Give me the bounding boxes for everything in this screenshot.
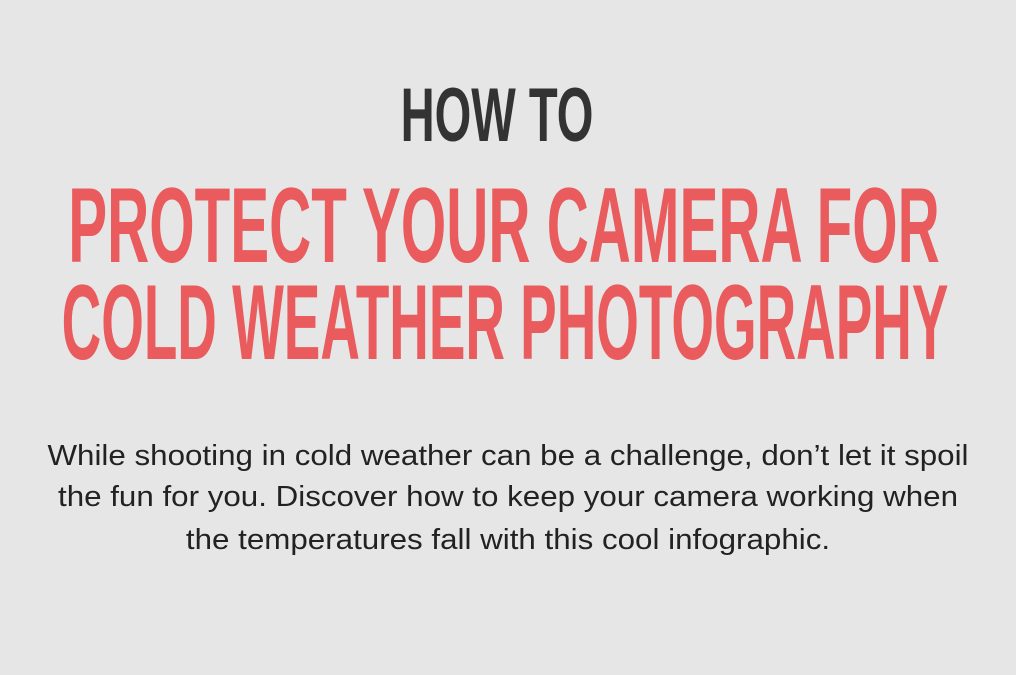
intro text [47, 440, 969, 556]
title: main heading [62, 165, 948, 382]
intro text: While shooting in cold weather can be a challenge, don’t let it spoil [47, 440, 969, 472]
title: main heading: PROTECT YOUR CAMERA FOR [68, 165, 940, 285]
title: main heading: COLD WEATHER PHOTOGRAPHY [62, 262, 948, 382]
text: HOW TO [401, 73, 593, 158]
intro text: the temperatures fall with this cool infographic. [186, 524, 830, 556]
intro text: the fun for you. Discover how to keep your camera working when [58, 481, 958, 513]
